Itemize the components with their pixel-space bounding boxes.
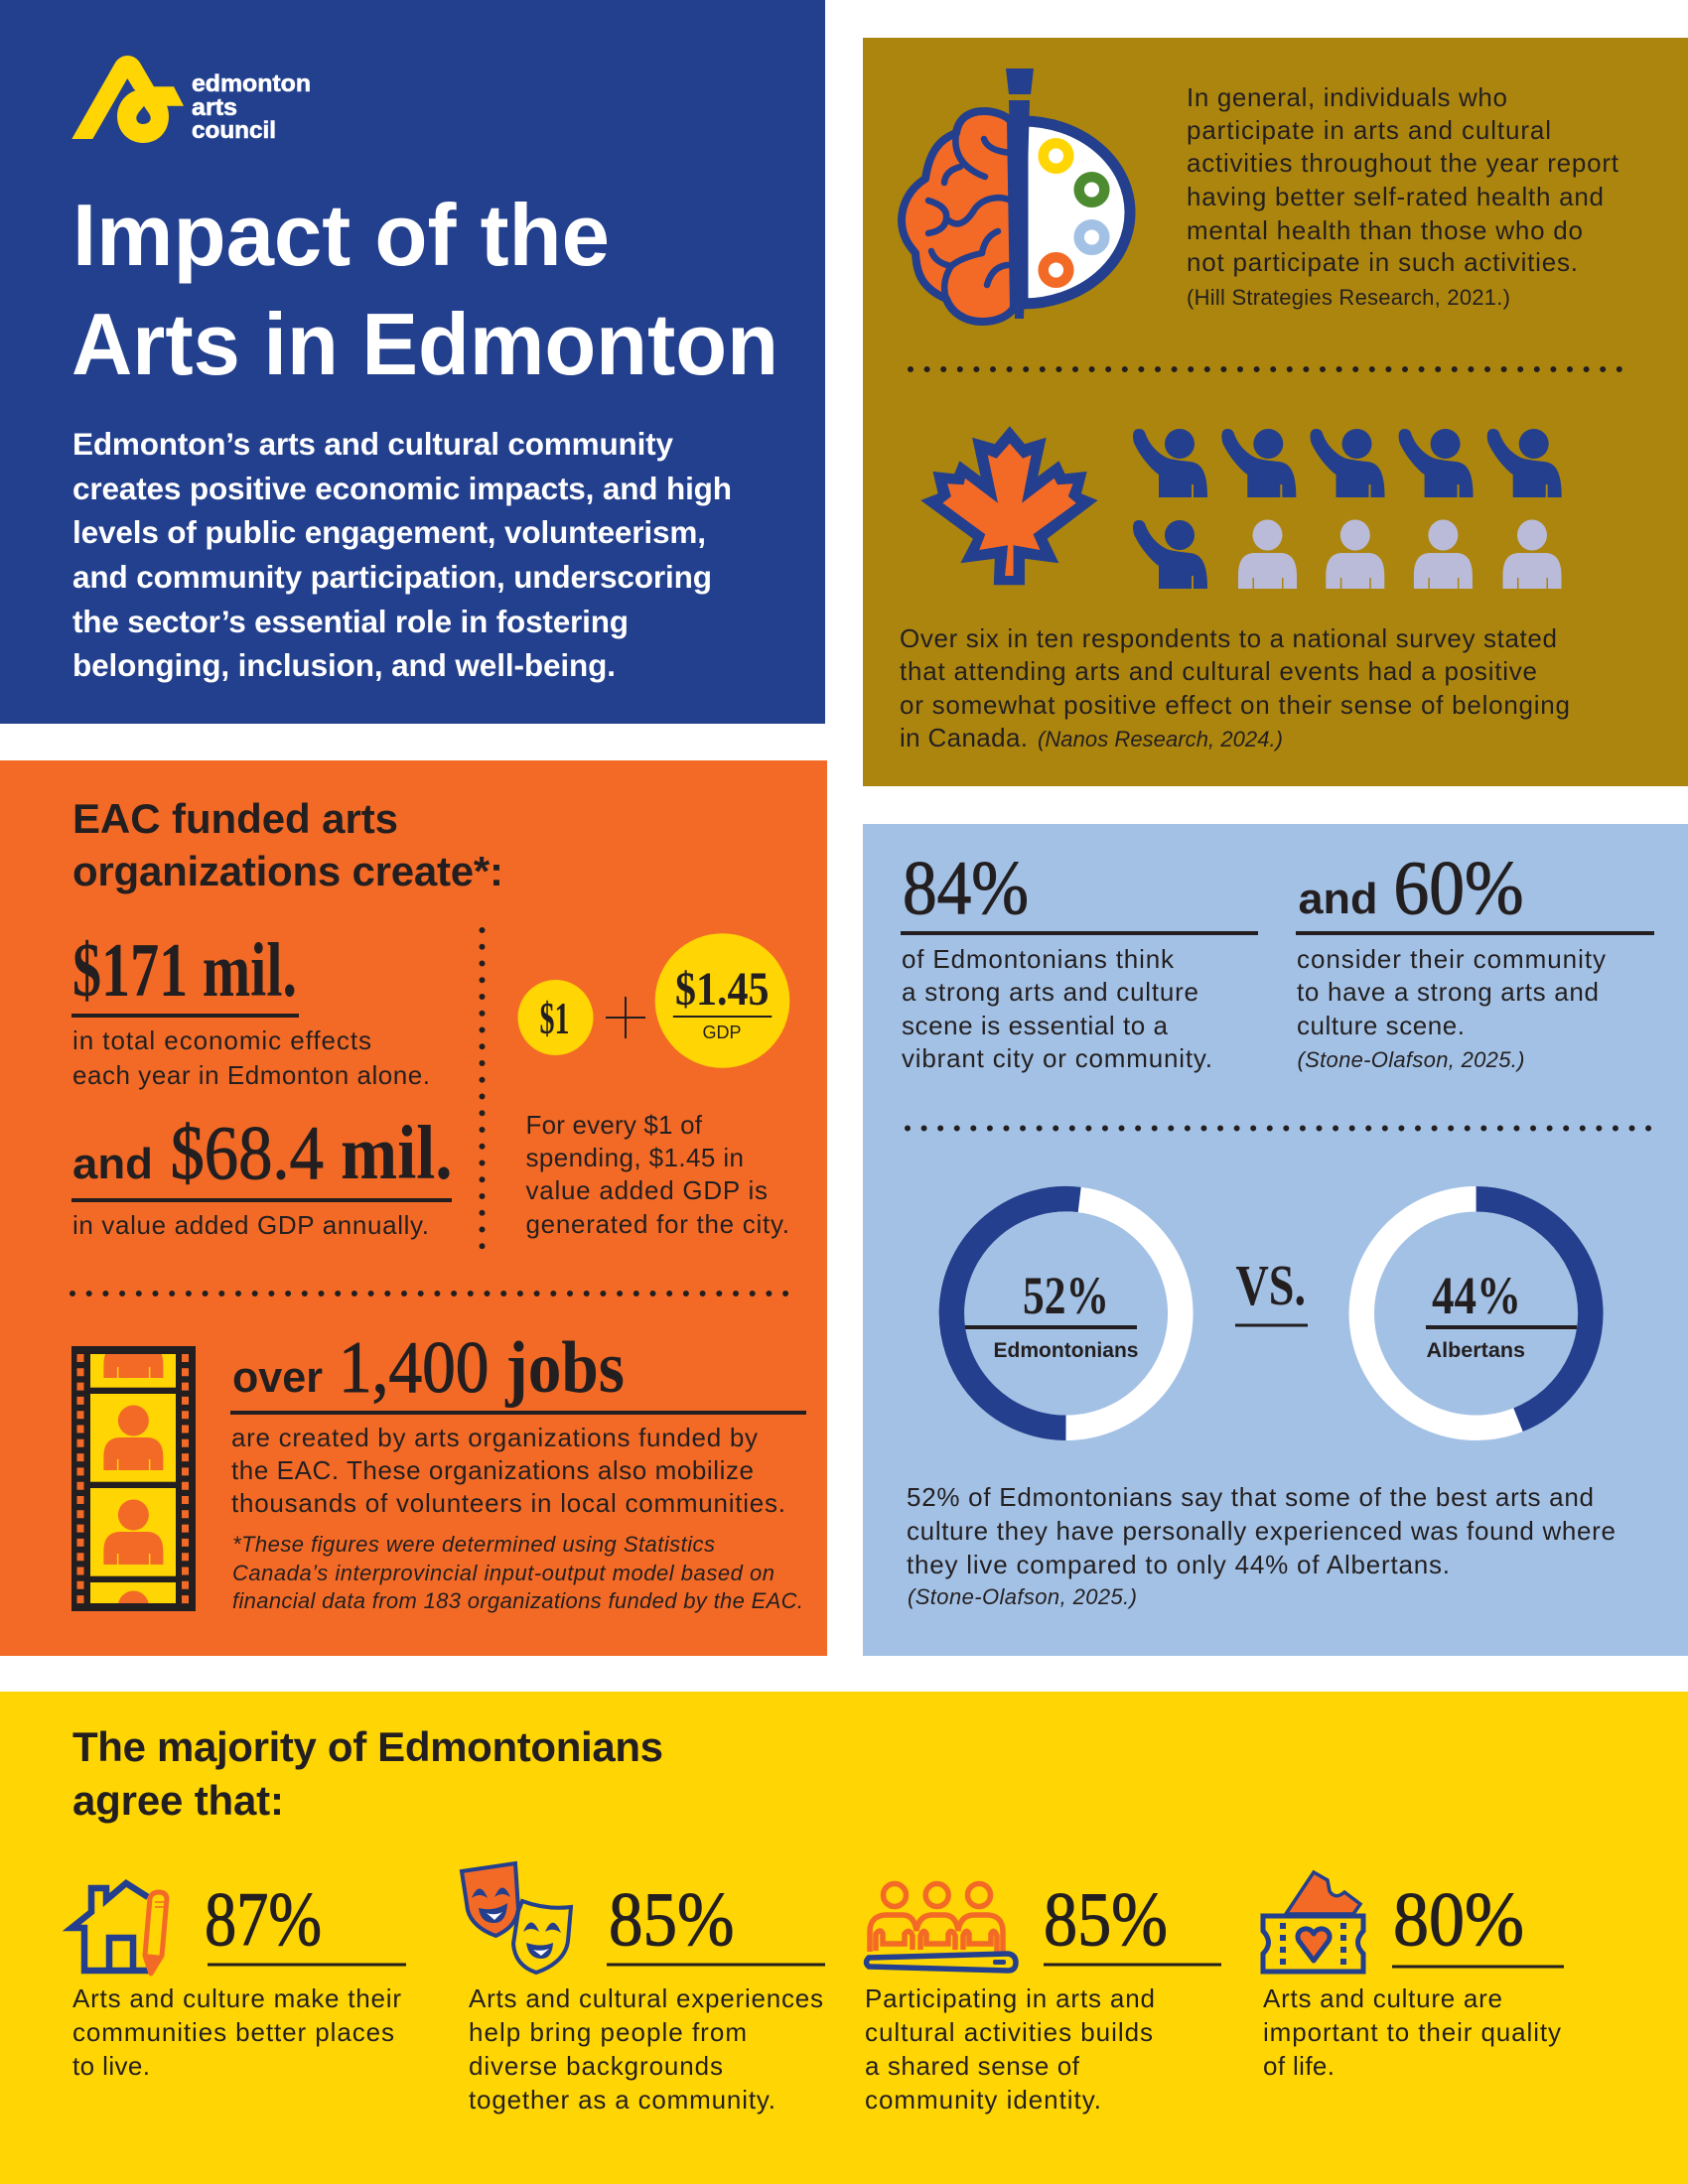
stat: 1,400 jobs: 1,400 jobs bbox=[339, 1327, 625, 1409]
stat: 84%: scene is essential to a bbox=[902, 1011, 1169, 1040]
stat: 60%: and bbox=[1299, 875, 1378, 923]
text: sense of belonging: or somewhat positive effect on their sense of belonging bbox=[900, 690, 1570, 720]
text: every dollar of spending: value added GDP is bbox=[526, 1175, 768, 1205]
icon: dollar equals GDP circles: $1 bbox=[540, 993, 570, 1043]
stat: 85% community identity bbox=[865, 1876, 1221, 2115]
chart: donut 52% Edmontonians: Edmontonians bbox=[993, 1339, 1138, 1362]
stat: 60%: culture scene. bbox=[1297, 1011, 1465, 1040]
stat: 84%: 84% bbox=[903, 845, 1029, 930]
stat: 85% community identity: Participating in arts and bbox=[865, 1983, 1155, 2013]
text: every dollar of spending bbox=[526, 1110, 789, 1239]
text: sense of belonging: that attending arts and cultural events had a positive bbox=[900, 656, 1537, 686]
stat: $171 million: in total economic effects bbox=[72, 1025, 371, 1055]
title: Impact of the bbox=[72, 186, 610, 284]
text: best arts experiences: 52% of Edmontonians say that some of the best arts and bbox=[907, 1482, 1594, 1512]
stat: 60% bbox=[1296, 845, 1654, 1072]
stat: 80% quality of life: Arts and culture are bbox=[1263, 1983, 1502, 2013]
intro paragraph: Edmonton’s arts and cultural community bbox=[72, 426, 673, 462]
stat: 60%: 60% bbox=[1394, 845, 1523, 930]
heading: EAC funded arts organizations: organizations create*: bbox=[72, 848, 503, 894]
text: self-rated health: (Hill Strategies Research, 2021.) bbox=[1187, 285, 1510, 310]
stat: 87% better places to live: to live. bbox=[72, 2051, 150, 2081]
stat: 85% diverse backgrounds bbox=[462, 1863, 825, 2115]
text: self-rated health: not participate in such activities. bbox=[1187, 247, 1578, 277]
logo: edmonton arts council bbox=[71, 56, 311, 144]
stat: 1,400 jobs: over bbox=[232, 1353, 323, 1402]
footnote: financial data from 183 organizations funded by the EAC. bbox=[232, 1588, 803, 1613]
stat: 60%: (Stone-Olafson, 2025.) bbox=[1297, 1047, 1525, 1072]
text: sense of belonging: Over six in ten respondents to a national survey stated bbox=[900, 623, 1557, 653]
logo: edmonton arts council: arts bbox=[192, 94, 237, 121]
text: self-rated health: having better self-rated health and bbox=[1187, 182, 1604, 211]
stat: 84%: vibrant city or community. bbox=[902, 1043, 1212, 1073]
stat: 85% diverse backgrounds: 85% bbox=[609, 1876, 735, 1962]
logo: edmonton arts council: edmonton bbox=[192, 70, 311, 97]
icon: six of ten people raising hands bbox=[1133, 429, 1562, 589]
logo: edmonton arts council: council bbox=[192, 117, 276, 144]
stat: 87% better places to live: communities better places bbox=[72, 2017, 394, 2047]
stat: 87% better places to live: Arts and culture make their bbox=[72, 1983, 401, 2013]
stat: 85% diverse backgrounds: Arts and cultural experiences bbox=[469, 1983, 823, 2013]
text: best arts experiences bbox=[907, 1482, 1616, 1609]
icon: film strip bbox=[71, 1346, 196, 1611]
chart: donut 52% Edmontonians: 52% bbox=[1023, 1266, 1109, 1325]
panel: header bbox=[0, 0, 825, 724]
stat: 80% quality of life: important to their quality bbox=[1263, 2017, 1561, 2047]
title: Arts in Edmonton bbox=[71, 295, 778, 393]
chart: donut 44% Albertans: 44% bbox=[1432, 1266, 1521, 1325]
panel: health and belonging bbox=[863, 38, 1688, 786]
chart: donut 44% Albertans bbox=[1361, 1199, 1591, 1428]
icon: ticket with heart bbox=[1263, 1872, 1363, 1972]
text: every dollar of spending: For every $1 of bbox=[526, 1110, 703, 1140]
chart: donut 52% Edmontonians bbox=[951, 1199, 1181, 1428]
text: sense of belonging bbox=[900, 623, 1570, 752]
footnote: Canada’s interprovincial input-output model based on bbox=[232, 1561, 774, 1585]
stat: 87% better places to live: 87% bbox=[205, 1876, 322, 1962]
chart: donut 44% Albertans: Albertans bbox=[1426, 1339, 1525, 1362]
intro paragraph bbox=[72, 426, 732, 683]
heading: EAC funded arts organizations: EAC funded arts bbox=[72, 795, 398, 842]
stat: 85% community identity: cultural activities builds bbox=[865, 2017, 1153, 2047]
icon: brain and palette bbox=[902, 68, 1130, 322]
icon: maple leaf bbox=[920, 426, 1098, 585]
stat: 1,400 jobs: are created by arts organizations funded by bbox=[231, 1423, 758, 1452]
stat: $68.4 million: in value added GDP annually. bbox=[72, 1210, 429, 1240]
heading: EAC funded arts organizations bbox=[72, 795, 503, 894]
stat: 80% quality of life: of life. bbox=[1263, 2051, 1335, 2081]
footnote: *These figures were determined using Statistics bbox=[232, 1532, 715, 1557]
text: self-rated health: In general, individuals who bbox=[1187, 82, 1507, 112]
stat: 85% diverse backgrounds: diverse backgrounds bbox=[469, 2051, 723, 2081]
stat: 85% diverse backgrounds: help bring people from bbox=[469, 2017, 747, 2047]
text: every dollar of spending: generated for the city. bbox=[526, 1209, 789, 1239]
stat: 85% community identity: community identity. bbox=[865, 2085, 1101, 2115]
panel: economic impact bbox=[0, 760, 827, 1656]
stat: $68.4 million: and bbox=[72, 1140, 153, 1188]
intro paragraph: creates positive economic impacts, and high bbox=[72, 471, 732, 506]
stat: $68.4 million: $68.4 mil. bbox=[171, 1110, 453, 1195]
stat: 80% quality of life: 80% bbox=[1393, 1876, 1524, 1962]
icon: dollar equals GDP circles bbox=[518, 933, 789, 1068]
panel: majority agree bbox=[0, 1692, 1688, 2184]
text: sense of belonging: (Nanos Research, 2024.) bbox=[1038, 727, 1283, 751]
stat: 87% better places to live bbox=[71, 1876, 406, 2081]
stat: 1,400 jobs: the EAC. These organizations also mobilize bbox=[231, 1455, 754, 1485]
text: self-rated health: participate in arts and cultural bbox=[1187, 115, 1551, 145]
stat: $171 million bbox=[71, 927, 430, 1090]
text: best arts experiences: they live compared to only 44% of Albertans. bbox=[907, 1550, 1450, 1579]
label: versus: VS. bbox=[1235, 1253, 1306, 1317]
intro paragraph: belonging, inclusion, and well-being. bbox=[72, 647, 616, 683]
stat: 85% diverse backgrounds: together as a community. bbox=[469, 2085, 775, 2115]
icon: dollar equals GDP circles: GDP bbox=[702, 1023, 742, 1042]
intro paragraph: levels of public engagement, volunteerism, bbox=[72, 514, 706, 550]
stat: 1,400 jobs: thousands of volunteers in local communities. bbox=[231, 1488, 785, 1518]
text: every dollar of spending: spending, $1.45 in bbox=[526, 1143, 744, 1172]
text: best arts experiences: (Stone-Olafson, 2025.) bbox=[908, 1584, 1137, 1609]
stat: 85% community identity: a shared sense of bbox=[865, 2051, 1080, 2081]
stat: $171 million: each year in Edmonton alone. bbox=[72, 1060, 430, 1090]
panel: public opinion bbox=[863, 824, 1688, 1656]
stat: 84%: of Edmontonians think bbox=[902, 944, 1175, 974]
stat: $171 million: $171 mil. bbox=[72, 927, 297, 1013]
footnote bbox=[232, 1532, 803, 1613]
stat: 1,400 jobs bbox=[230, 1327, 806, 1518]
text: self-rated health: mental health than those who do bbox=[1187, 215, 1583, 245]
text: self-rated health bbox=[1187, 82, 1619, 310]
title bbox=[71, 186, 778, 393]
stat: 60%: to have a strong arts and bbox=[1297, 977, 1599, 1007]
stat: $68.4 million bbox=[71, 1110, 453, 1240]
icon: theatre masks bbox=[462, 1863, 571, 1973]
stat: 60%: consider their community bbox=[1297, 944, 1606, 974]
stat: 84%: a strong arts and culture bbox=[902, 977, 1198, 1007]
stat: 80% quality of life bbox=[1263, 1872, 1564, 2081]
icon: house and pencil bbox=[71, 1883, 167, 1976]
heading: majority of Edmontonians bbox=[72, 1723, 663, 1824]
text: self-rated health: activities throughout the year report bbox=[1187, 148, 1619, 178]
heading: majority of Edmontonians: The majority of Edmontonians bbox=[72, 1723, 663, 1770]
icon: dollar equals GDP circles: $1.45 bbox=[675, 963, 769, 1016]
intro paragraph: and community participation, underscoring bbox=[72, 559, 712, 595]
stat: 84% bbox=[901, 845, 1258, 1073]
stat: 85% community identity: 85% bbox=[1044, 1876, 1168, 1962]
icon: audience seats and pencil bbox=[866, 1884, 1016, 1972]
heading: majority of Edmontonians: agree that: bbox=[72, 1777, 284, 1824]
text: best arts experiences: culture they have personally experienced was found where bbox=[907, 1516, 1616, 1546]
intro paragraph: the sector’s essential role in fostering bbox=[72, 604, 629, 639]
text: sense of belonging: in Canada. bbox=[900, 723, 1028, 752]
